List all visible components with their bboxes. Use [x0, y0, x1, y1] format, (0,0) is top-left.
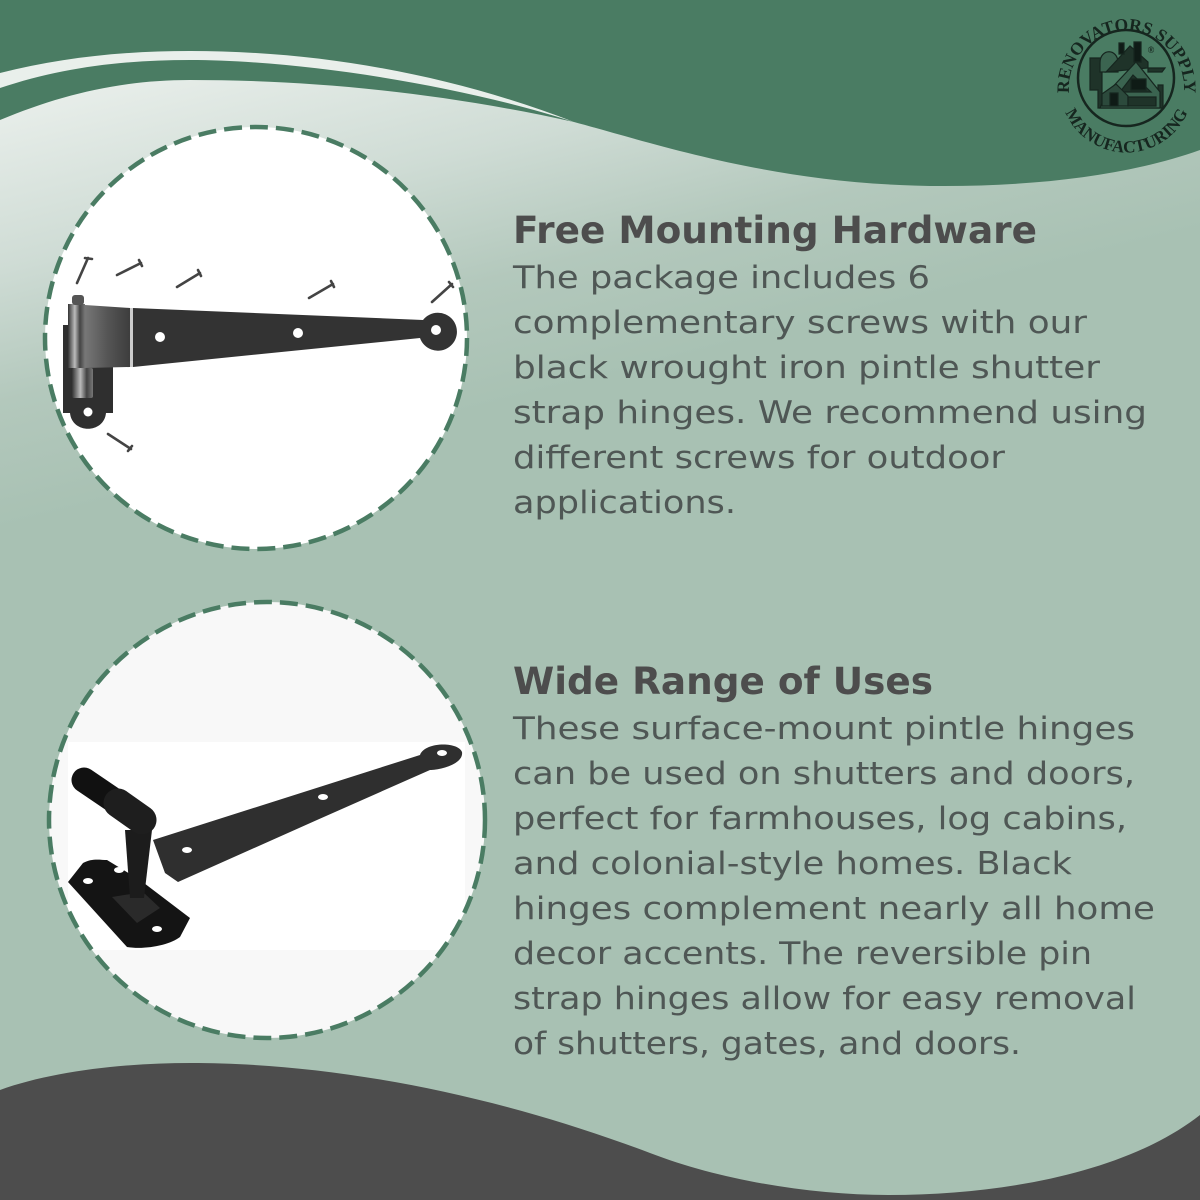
logo: Renovators Supply Manufacturing [1057, 18, 1196, 153]
body text: different screws for outdoor [513, 440, 1005, 476]
logo: Renovators Supply Manufacturing: MANUFACTURING [1065, 107, 1187, 153]
panel: image circle, screws and strap hinge [45, 127, 467, 549]
dark bottom wave [0, 1063, 1200, 1200]
body text: of shutters, gates, and doors. [513, 1026, 1021, 1062]
text block: free mounting hardware [512, 209, 1147, 521]
body text: and colonial-style homes. Black [513, 846, 1072, 882]
body text: strap hinges allow for easy removal [513, 981, 1136, 1017]
body text: black wrought iron pintle shutter [513, 350, 1100, 386]
body text: perfect for farmhouses, log cabins, [513, 801, 1127, 837]
body text: decor accents. The reversible pin [513, 936, 1092, 972]
body text [512, 711, 1155, 1062]
logo: Renovators Supply Manufacturing: RENOVATORS SUPPLY [1057, 18, 1196, 93]
body text: The package includes 6 [512, 260, 930, 296]
icon: house [1090, 42, 1165, 108]
light swoosh [0, 51, 574, 122]
body text: These surface-mount pintle hinges [512, 711, 1135, 747]
icon: pintle strap hinge [63, 295, 457, 429]
panel: image circle, black pintle hinge [49, 602, 485, 1038]
body text [512, 260, 1147, 521]
icon: screws [77, 258, 453, 451]
logo: Renovators Supply Manufacturing: ® [1148, 45, 1155, 55]
text block: wide range of uses [512, 660, 1155, 1062]
green top wave [0, 0, 1200, 186]
icon: black pintle hinge [68, 744, 462, 948]
body text: applications. [513, 485, 736, 521]
body text: complementary screws with our [513, 305, 1087, 341]
body text: hinges complement nearly all home [513, 891, 1155, 927]
body text: can be used on shutters and doors, [513, 756, 1135, 792]
body text: strap hinges. We recommend using [513, 395, 1147, 431]
heading: Wide Range of Uses [513, 660, 933, 703]
heading: Free Mounting Hardware [513, 209, 1037, 252]
